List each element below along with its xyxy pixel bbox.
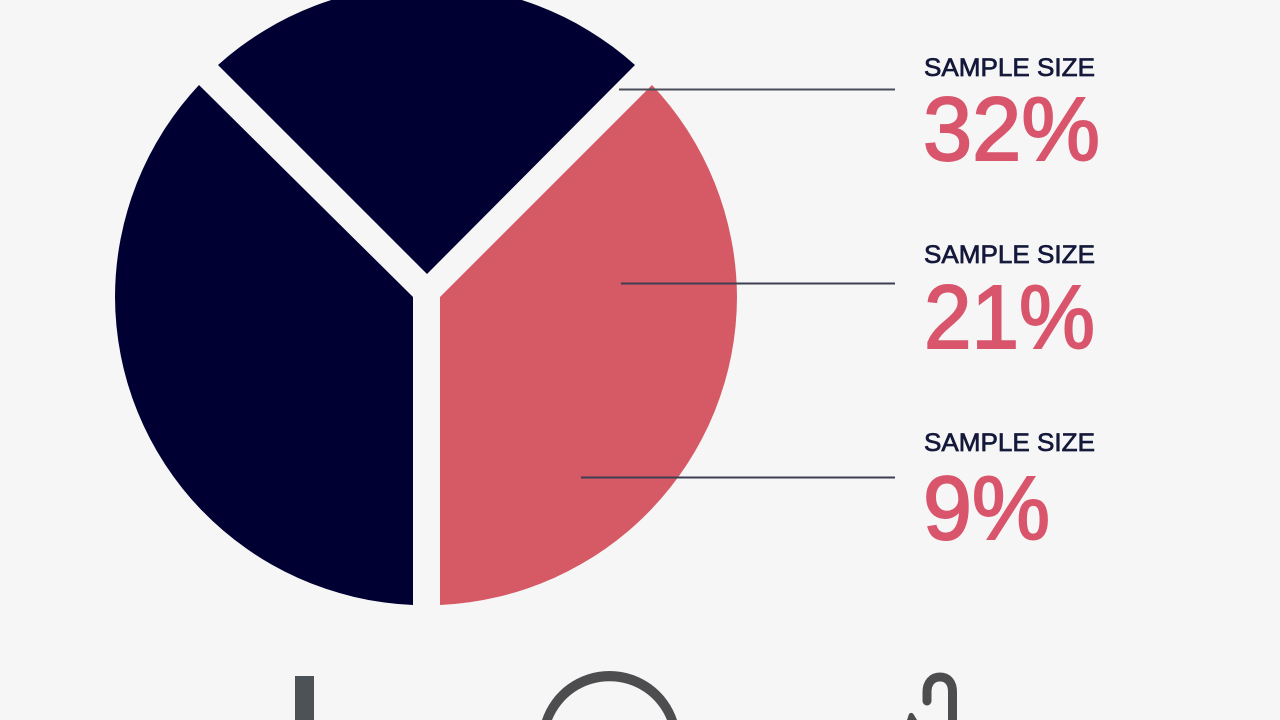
label: sample size: SAMPLE SIZE bbox=[924, 241, 1095, 269]
value: 21%: 21% bbox=[924, 268, 1095, 368]
label: sample size: SAMPLE SIZE bbox=[924, 429, 1095, 457]
pie chart bbox=[115, 0, 737, 605]
callout: 9% bbox=[923, 429, 1095, 559]
leader line: 32% bbox=[619, 88, 895, 90]
callout: 32% bbox=[923, 54, 1100, 180]
leader line: 9% bbox=[581, 476, 895, 478]
value: 32%: 32% bbox=[923, 80, 1100, 180]
icon: cropped hook bbox=[907, 677, 952, 720]
icon: cropped ring bbox=[542, 671, 677, 720]
leader line: 21% bbox=[621, 282, 895, 284]
hook curve bbox=[927, 677, 952, 720]
value: 9%: 9% bbox=[923, 459, 1050, 559]
pie slice: right coral bbox=[440, 85, 737, 605]
callout: 21% bbox=[924, 241, 1095, 368]
hook tail fragment bbox=[907, 713, 917, 720]
pie slice: left navy bbox=[115, 85, 413, 605]
pie slice: top navy bbox=[218, 0, 635, 274]
icon: cropped bar bbox=[295, 676, 314, 720]
label: sample size: SAMPLE SIZE bbox=[924, 54, 1095, 82]
